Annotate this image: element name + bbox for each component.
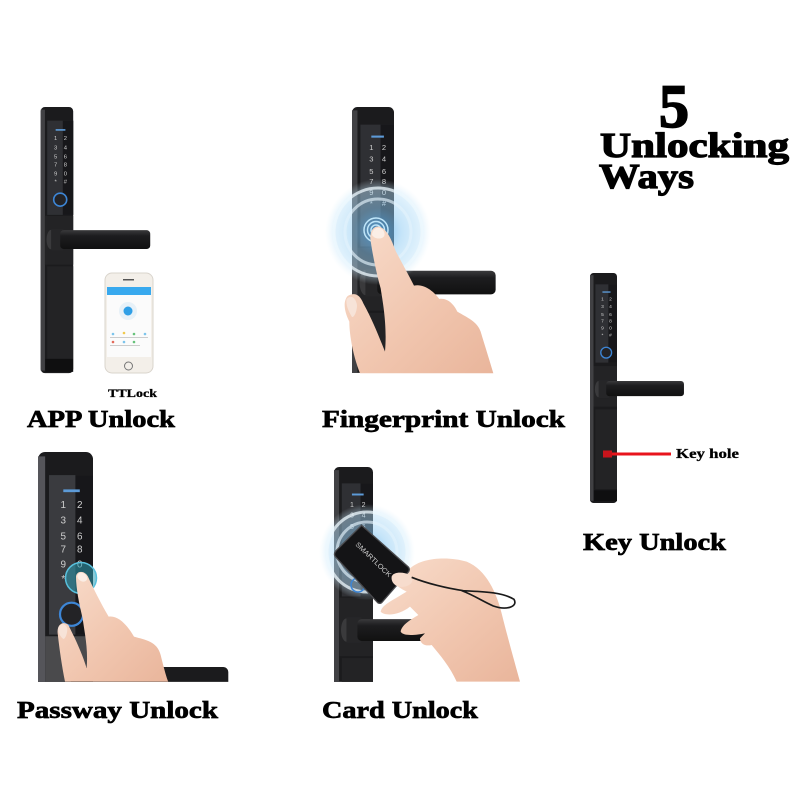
lock: app unlock door lock: 4 [64, 145, 68, 151]
panel: card unlock [319, 467, 520, 724]
heading: Passway Unlock: Passway Unlock [17, 698, 219, 724]
lock: fingerprint unlock door lock: 7 [369, 177, 373, 186]
phone with TTLock app [105, 273, 153, 373]
lock: key unlock door lock: # [609, 333, 612, 339]
lock: app unlock door lock: 0 [64, 171, 68, 177]
lock: key unlock door lock: 5 [601, 312, 604, 318]
fingerprint scan waves [325, 179, 431, 285]
lock: app unlock door lock: 9 [54, 171, 57, 177]
hand shape [58, 572, 168, 682]
title: 5 Unlocking Ways [599, 74, 790, 196]
lock: fingerprint unlock door lock: # [382, 199, 387, 208]
lock: fingerprint unlock door lock: 5 [369, 167, 373, 176]
title: 5 Unlocking Ways: Ways [599, 157, 694, 196]
lock: passway unlock door lock: 7 [61, 545, 66, 556]
lock: passway unlock door lock: 0 [77, 560, 83, 571]
panel: fingerprint unlock [322, 107, 566, 433]
panel: APP unlock [27, 107, 176, 433]
thumb nail [346, 297, 357, 317]
fingertip nail [77, 573, 87, 582]
lock: passway unlock door lock: 2 [77, 500, 83, 511]
lock: fingerprint unlock door lock: 2 [382, 143, 386, 152]
lock: app unlock door lock: # [64, 180, 68, 186]
thumb nail [58, 624, 67, 639]
lock: passway unlock door lock: * [61, 574, 65, 585]
label: Key hole: Key hole [676, 446, 739, 461]
lock: fingerprint unlock door lock: * [370, 199, 373, 208]
hand pressing keypad [58, 572, 168, 682]
fingertip nail [372, 228, 385, 238]
hand holding card and lanyard [334, 525, 520, 682]
lock: key unlock door lock: 8 [609, 318, 612, 324]
lock: card unlock door lock: 1 [350, 502, 354, 509]
lock: app unlock door lock [41, 107, 150, 373]
heading: Key Unlock: Key Unlock [583, 530, 727, 556]
touch ripple on keypad [66, 562, 96, 594]
lock: passway unlock door lock [38, 452, 228, 682]
title: 5 Unlocking Ways: Unlocking [600, 126, 790, 165]
lock: app unlock door lock: 3 [54, 145, 57, 151]
lock: app unlock door lock: * [55, 180, 58, 186]
lock: app unlock door lock: 5 [54, 155, 57, 161]
hand shape [345, 227, 493, 373]
lock: passway unlock door lock: 9 [61, 560, 67, 571]
lock: key unlock door lock: 7 [601, 318, 604, 324]
card scan waves [319, 504, 415, 600]
lock: fingerprint unlock door lock: 9 [369, 188, 373, 197]
lock: passway unlock door lock: # [77, 574, 83, 585]
arrow: red line to key hole [603, 450, 671, 458]
lock: passway unlock door lock: 4 [77, 516, 83, 527]
lock: app unlock door lock: 1 [54, 136, 57, 142]
lock: key unlock door lock: 4 [609, 304, 612, 310]
heading: APP Unlock: APP Unlock [27, 407, 176, 433]
heading: Fingerprint Unlock: Fingerprint Unlock [322, 407, 566, 433]
lock: key unlock door lock: 6 [609, 312, 612, 318]
lock: app unlock door lock: 6 [64, 155, 67, 161]
lock: passway unlock door lock: 3 [61, 516, 67, 527]
lock: app unlock door lock: 7 [54, 162, 57, 168]
lock: fingerprint unlock door lock [352, 107, 496, 393]
lock: passway unlock door lock: 5 [61, 531, 67, 542]
lock: fingerprint unlock door lock: 3 [369, 155, 373, 164]
lock: passway unlock door lock: 1 [61, 500, 67, 511]
lock: passway unlock door lock: 6 [77, 531, 83, 542]
lock: key unlock door lock: 9 [601, 326, 604, 332]
lock: fingerprint unlock door lock: 1 [369, 143, 373, 152]
heading: Card Unlock: Card Unlock [322, 698, 479, 724]
lock: fingerprint unlock door lock: 4 [382, 155, 386, 164]
lock: key unlock door lock: 3 [601, 304, 604, 310]
hand pressing fingerprint sensor [345, 227, 493, 373]
lock: passway unlock door lock: 8 [77, 545, 83, 556]
thumb [392, 573, 412, 587]
lock: key unlock door lock: 1 [601, 297, 604, 303]
lock: key unlock door lock: * [601, 333, 603, 339]
lock: fingerprint unlock door lock: 8 [382, 177, 386, 186]
panel: passway unlock [17, 452, 228, 724]
smart card [334, 525, 409, 603]
panel: key unlock [583, 273, 739, 556]
lock: card unlock door lock [334, 467, 425, 682]
lock: fingerprint unlock door lock: 0 [382, 188, 386, 197]
hand [381, 558, 520, 682]
lock: app unlock door lock: 2 [64, 136, 67, 142]
lock: key unlock door lock: 2 [609, 297, 612, 303]
lock: card unlock door lock: 5 [350, 524, 354, 531]
card label: SMARTLOCK [354, 541, 392, 579]
lock: key unlock door lock [590, 273, 684, 503]
lanyard [412, 577, 515, 608]
lock: key unlock door lock: 0 [609, 326, 612, 332]
lock: card unlock door lock: 6 [362, 524, 366, 531]
title: 5 Unlocking Ways: 5 [659, 74, 689, 141]
label: TTLock: TTLock [108, 386, 157, 400]
lock: card unlock door lock: 4 [362, 513, 366, 520]
lock: app unlock door lock: 8 [64, 162, 67, 168]
lock: fingerprint unlock door lock: 6 [382, 167, 386, 176]
lock: card unlock door lock: 3 [350, 513, 354, 520]
lock: card unlock door lock: 2 [362, 502, 366, 509]
